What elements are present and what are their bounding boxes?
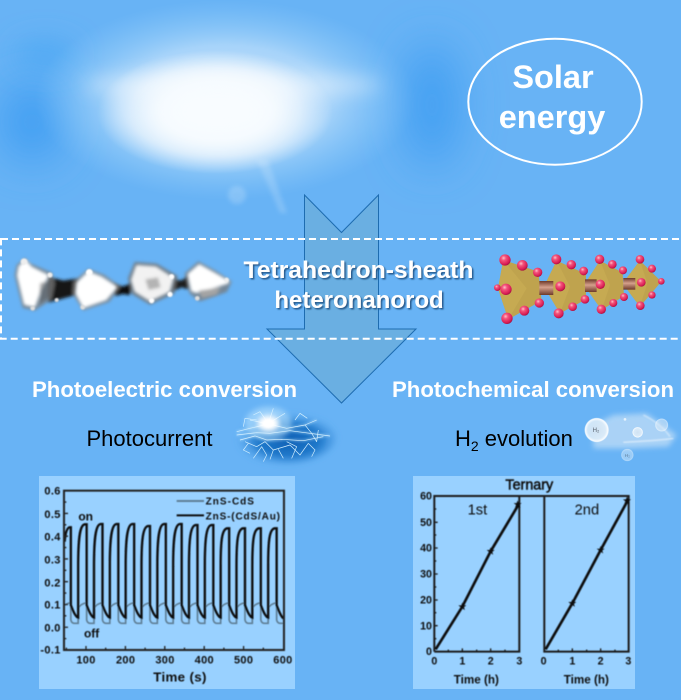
heading: Photoelectric conversion: Photoelectric conversion (32, 377, 297, 402)
x axis labels: 200 (116, 654, 135, 666)
chart title: Ternary (505, 478, 554, 494)
y axis labels (40, 486, 61, 657)
heading: Tetrahedron-sheath heteronanorod: heteronanorod (274, 287, 444, 314)
icon: hydrogen bubbles (584, 413, 677, 461)
label: H2 evolution: H (455, 426, 471, 451)
label: H2 evolution: 2 (471, 438, 479, 454)
label ellipse: Solar energy: energy (499, 99, 605, 135)
heading: Tetrahedron-sheath heteronanorod (244, 257, 474, 314)
run labels: 2nd (575, 502, 599, 518)
x axis labels: 2 (598, 656, 604, 668)
y axis labels: 0 (426, 646, 432, 658)
label: Photocurrent: Photocurrent (86, 426, 212, 451)
y axis labels: 0.4 (44, 531, 61, 543)
x axis labels: 3 (516, 656, 522, 668)
panel: H2 evolution chart (413, 476, 635, 689)
y axis labels: 0.2 (44, 577, 61, 589)
icon: lightning (230, 407, 337, 465)
curve: ZnS-(CdS/Au) (65, 524, 283, 618)
x axis labels: 500 (234, 654, 253, 666)
x axis titles: Time (h) (454, 674, 499, 687)
atoms (494, 254, 665, 324)
legend (177, 497, 280, 523)
label ellipse: Solar energy: Solar (512, 59, 594, 95)
annotation: off: off (84, 626, 100, 640)
y axis labels: 20 (420, 595, 432, 607)
x axis titles (454, 674, 609, 687)
y axis labels: 50 (420, 517, 432, 529)
x axis title: Time (s) (153, 670, 207, 685)
curve: ZnS-CdS (55, 603, 292, 623)
line: 2nd run (546, 497, 631, 649)
x axis labels: 3 (625, 656, 631, 668)
x axis titles: Time (h) (564, 674, 609, 687)
axes frame (64, 491, 284, 650)
x axis labels (76, 654, 293, 666)
y axis labels (420, 491, 432, 658)
tetrahedra (498, 260, 661, 319)
x axis labels: 1 (569, 656, 575, 668)
y axis labels: 0.1 (44, 599, 61, 611)
panel: photocurrent chart (39, 476, 295, 689)
3D model of nanorod (494, 254, 665, 324)
x axis labels: 400 (195, 654, 214, 666)
TEM image of nanorod (15, 258, 232, 311)
line: 1st run (436, 500, 522, 649)
x axis labels: 0 (541, 656, 547, 668)
label ellipse: Solar energy (468, 39, 642, 165)
y axis labels: -0.1 (40, 645, 61, 657)
heading: Photochemical conversion: Photochemical conversion (392, 377, 674, 402)
heading: Tetrahedron-sheath heteronanorod: Tetrahedron-sheath (244, 257, 474, 284)
rods (539, 278, 635, 295)
run labels (468, 502, 599, 518)
annotation: on: on (78, 510, 93, 524)
y axis labels: 0.3 (44, 555, 61, 567)
y axis labels: 0.0 (44, 622, 61, 634)
y axis labels: 0.6 (44, 486, 61, 498)
legend: ZnS-(CdS/Au) (206, 512, 280, 523)
sun glare (0, 0, 458, 213)
y axis labels: 60 (420, 491, 432, 503)
arrow: block down arrow (267, 195, 416, 403)
run labels: 1st (468, 502, 487, 518)
icon: hydrogen bubbles: H₂ (625, 453, 630, 458)
x axis labels (431, 656, 631, 668)
y axis labels: 10 (420, 620, 432, 632)
x axis labels: 0 (431, 656, 437, 668)
axes frames (434, 496, 629, 652)
x axis labels: 600 (273, 654, 293, 666)
y axis labels: 0.5 (44, 509, 61, 521)
legend: ZnS-CdS (206, 497, 254, 508)
y axis labels: 30 (420, 569, 432, 581)
x axis labels: 100 (76, 654, 96, 666)
y axis labels: 40 (420, 543, 432, 555)
icon: hydrogen bubbles: H₂ (593, 428, 600, 434)
dashed frame (1, 239, 681, 339)
label: H2 evolution: evolution (479, 426, 573, 451)
x axis labels: 2 (488, 656, 494, 668)
x axis labels: 300 (155, 654, 175, 666)
x axis labels: 1 (459, 656, 465, 668)
